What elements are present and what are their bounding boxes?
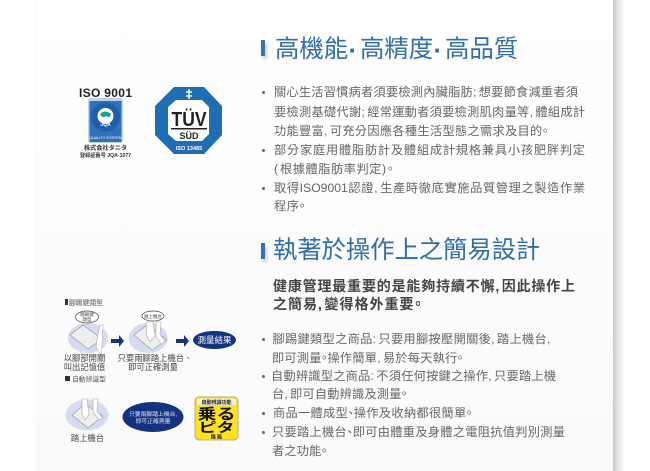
caption: step on scale [118,353,192,372]
bullet list: high performance points: 部分家庭用體脂肪計及體組成計規格兼具小孩肥胖判定 [274,143,585,157]
bullet list: easy operation points: : [373,332,376,346]
bullet list: easy operation points: 只要踏上機台 即可由體重及身體之電阻抗值判別測量 [272,425,565,439]
bullet list: high performance points: ) [382,162,386,176]
caption: foot press [64,353,105,372]
callout: step on to measure: 只要兩腳踏上機台, [129,410,177,418]
icon: ISO 9001 certification badge: QUALITY SYSTEM [89,136,122,140]
bullet list: high performance points: , [374,181,378,195]
icon: stepping on scale [66,399,108,430]
bullet list: high performance points: ( [274,162,278,176]
intro text: easy operation: 健康管理最重要的是能夠持續不懈 因此操作上 [273,278,575,294]
label: foot-switch type: 腳踢鍵類型 [69,298,103,307]
caption: step on scale: 即可正確測量 [128,362,178,372]
bullet list: high performance points: 根據體脂肪率判定 [280,162,382,176]
heading: high performance: 高品質 [445,36,518,63]
bullet list: easy operation points: , [491,332,495,346]
arrow: step two to result [176,335,189,347]
icon: yellow auto-recognition function badge: 乗る [198,406,236,423]
caption: step on platform: 踏上機台 [71,433,104,443]
bullet list: easy operation points: 。 [318,351,330,365]
icon: scale with foot tap: 類型 [82,316,92,323]
icon: TUV SUD certification badge: TÜV [172,108,207,131]
bullet list: high performance points: 取得ISO9001認證 生產時徹底實施品質管理之製造作業 [274,181,585,195]
bullet list: high performance points: 程序 [274,199,300,213]
icon: ISO 9001 certification badge: JQA [100,122,111,128]
label: foot-switch type [65,298,103,307]
icon: yellow auto-recognition function badge: 機 能 [211,434,222,440]
icon: scale with foot tap [68,311,108,355]
callout: measurement result [193,331,236,349]
bullet list: high performance points: ; [361,105,365,119]
icon: ISO 9001 certification badge [79,86,132,159]
callout: step on to measure [122,402,184,432]
bullet list: easy operation points [262,332,565,458]
heading: high performance: 高機能 [275,36,348,63]
bullet list: easy operation points: 、 [345,406,357,420]
bullet list: easy operation points: 腳踢鍵類型之商品 只要用腳按壓開關後 踏上機台 [272,332,547,346]
bullet list: high performance points: ; [473,85,476,99]
icon: yellow auto-recognition function badge: 自動辨識功能 [201,399,232,406]
label: auto-recognition type: 自動辨識型 [72,374,106,384]
heading: high performance: 高精度 [360,36,433,63]
heading: high performance: · [348,35,357,65]
bullet list: easy operation points: 者之功能 [272,444,322,458]
callout: step on to measure: 即可正確測量 [136,417,171,425]
caption: step on scale: 只要兩腳踏上機台、 [118,353,192,363]
icon: TUV SUD certification badge: SÜD [179,131,199,141]
label: auto-recognition type [65,374,106,384]
icon: TUV SUD certification badge [155,87,222,154]
intro text: easy operation: , [318,296,322,312]
bullet list: easy operation points: 商品一體成型 操作及收納都很簡單 [273,406,467,420]
intro text: easy operation [273,278,575,312]
bullet list: easy operation points: : [371,369,374,383]
intro text: easy operation: 之簡易 變得格外重要 [273,296,414,312]
bullet list: high performance points: , [530,105,533,119]
icon: yellow auto-recognition function badge [195,397,238,440]
icon: ISO 9001 certification badge: 株式会社タニタ [84,144,127,152]
icon: TUV SUD certification badge: ISO 13485 [176,146,202,152]
bullet list: easy operation points: , [547,332,550,346]
callout: measurement result: 測量結果 [197,335,232,345]
heading: high performance: · [434,35,442,65]
bullet list: easy operation points: , [284,387,288,401]
caption: foot press: 以腳部開關 [64,353,105,363]
icon: yellow auto-recognition function badge: ピタ [198,420,234,435]
bullet list: high performance points: , [324,124,327,138]
heading: easy operation: 執著於操作上之簡易設計 [273,237,540,264]
arrow: step one to two [111,335,124,347]
bullet list: easy operation points: 台 即可自動辨識及測量 [272,387,402,401]
bullet list: high performance points: 要檢測基礎代謝 經常運動者須要檢測肌肉量等 體組成計 [274,105,585,119]
caption: foot press: 叫出記憶值 [64,362,105,372]
bullet list: high performance points: 功能豐富 可充分因應各種生活型態之需求及目的 [274,124,543,138]
intro text: easy operation: , [495,278,499,294]
icon: scale with both feet: 踏上機台 [144,313,162,320]
bullet list: easy operation points: , [377,351,381,365]
bullet list: high performance points [262,85,585,213]
heading: high performance [261,35,518,65]
bullet list: easy operation points: 即可測量 操作簡單 易於每天執行 [272,351,458,365]
bullet list: easy operation points: , [488,369,492,383]
bullet list: easy operation points: 自動辨識型之商品 不須任何按鍵之操作 只要踏上機 [271,369,556,383]
bullet list: easy operation points: 、 [344,425,356,439]
icon: scale with foot tap: 腳踢鍵 [80,311,94,318]
bullet list: high performance points: 關心生活習慣病者須要檢測內臟脂肪 想要節食減重者須 [274,85,578,99]
icon: scale with both feet [128,311,168,353]
icon: ISO 9001 certification badge: ISO 9001 [79,86,132,100]
icon: ISO 9001 certification badge: 登録証番号 JQA-1077 [80,151,131,159]
